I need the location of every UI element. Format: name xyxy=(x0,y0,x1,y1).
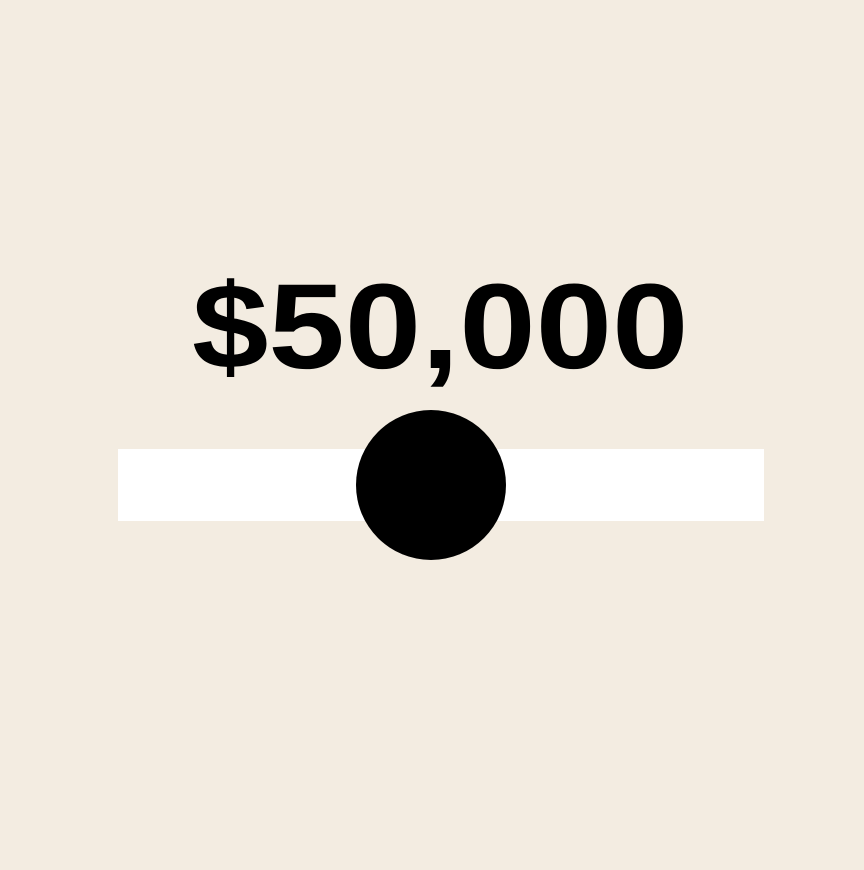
slider knob xyxy=(356,410,506,560)
slider track xyxy=(118,449,764,521)
slider xyxy=(118,410,764,560)
heading: amount: $50,000 xyxy=(192,258,688,394)
